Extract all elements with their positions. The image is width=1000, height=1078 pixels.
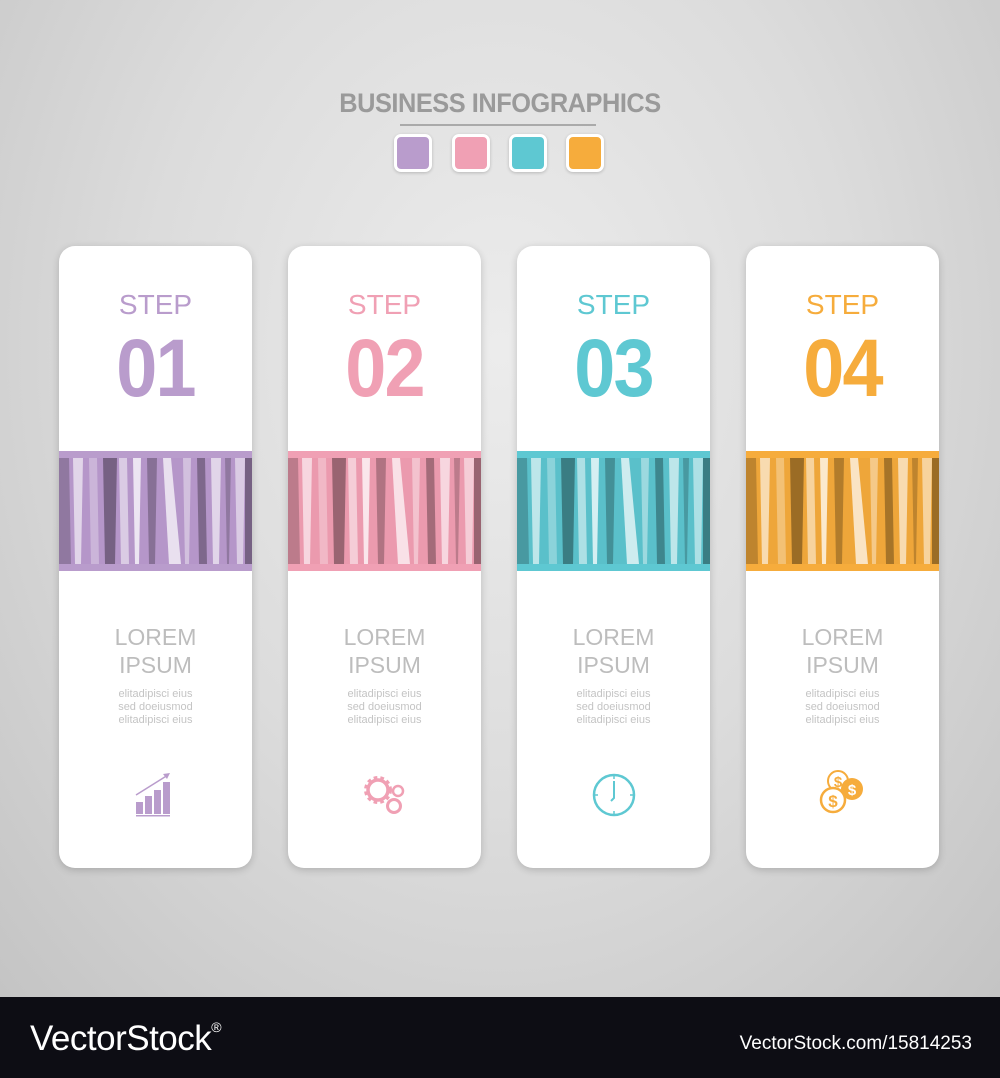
- text: lorem ipsum: [115, 624, 196, 678]
- text: lorem ipsum: IPSUM: [577, 652, 650, 678]
- icon: gears: [364, 776, 404, 814]
- text: description: elitadipisci eius: [806, 688, 879, 700]
- text: description: elitadipisci eius: [576, 714, 650, 726]
- text: lorem ipsum: LOREM: [573, 624, 654, 650]
- text: lorem ipsum: LOREM: [344, 624, 425, 650]
- icon: clock: [592, 774, 636, 816]
- band: stripes: [746, 451, 939, 571]
- text: lorem ipsum: IPSUM: [119, 652, 192, 678]
- text: description: elitadipisci eius: [118, 688, 192, 700]
- text: lorem ipsum: [344, 624, 425, 678]
- title: BUSINESS INFOGRAPHICS: [339, 88, 661, 118]
- icon: coins: $: [848, 782, 857, 799]
- text: lorem ipsum: IPSUM: [806, 652, 879, 678]
- heading: step 03: STEP: [577, 289, 650, 320]
- icon: coins: [820, 770, 863, 814]
- text: description: sed doeiusmod: [805, 701, 880, 713]
- text: lorem ipsum: [802, 624, 883, 678]
- heading: step 03: 03: [574, 323, 653, 414]
- band: stripes: [59, 451, 252, 571]
- heading: step 02: 02: [345, 323, 424, 414]
- text: description: sed doeiusmod: [576, 701, 651, 713]
- footer: [0, 997, 1000, 1078]
- text: description: [805, 688, 880, 726]
- text: description: [576, 688, 651, 726]
- icon: bar chart: [136, 773, 170, 816]
- band: stripes: [288, 451, 481, 571]
- text: description: [118, 688, 193, 726]
- heading: step 02: STEP: [348, 289, 421, 320]
- text: lorem ipsum: IPSUM: [348, 652, 421, 678]
- heading: step 01: STEP: [119, 289, 192, 320]
- text: description: elitadipisci eius: [348, 688, 421, 700]
- icon: coins: $: [828, 792, 838, 811]
- panel: step 02: [288, 246, 481, 868]
- footer url: VectorStock.com/15814253: [740, 1033, 972, 1054]
- text: description: elitadipisci eius: [576, 688, 650, 700]
- color squares: [392, 134, 606, 174]
- text: description: sed doeiusmod: [347, 701, 422, 713]
- footer logo: VectorStock®: [30, 1019, 221, 1058]
- text: description: [347, 688, 422, 726]
- text: description: elitadipisci eius: [806, 714, 879, 726]
- panel: step 03: [517, 246, 710, 868]
- panel: step 01: [59, 246, 252, 868]
- heading: step 04: STEP: [806, 289, 879, 320]
- band: stripes: [517, 451, 710, 571]
- text: description: elitadipisci eius: [348, 714, 421, 726]
- heading: step 01: 01: [116, 323, 195, 414]
- text: lorem ipsum: LOREM: [115, 624, 196, 650]
- icon: coins: $: [834, 774, 843, 791]
- heading: step 04: 04: [803, 323, 882, 414]
- panel: step 04: [746, 246, 939, 868]
- text: description: sed doeiusmod: [118, 701, 193, 713]
- text: lorem ipsum: LOREM: [802, 624, 883, 650]
- text: lorem ipsum: [573, 624, 654, 678]
- text: description: elitadipisci eius: [118, 714, 192, 726]
